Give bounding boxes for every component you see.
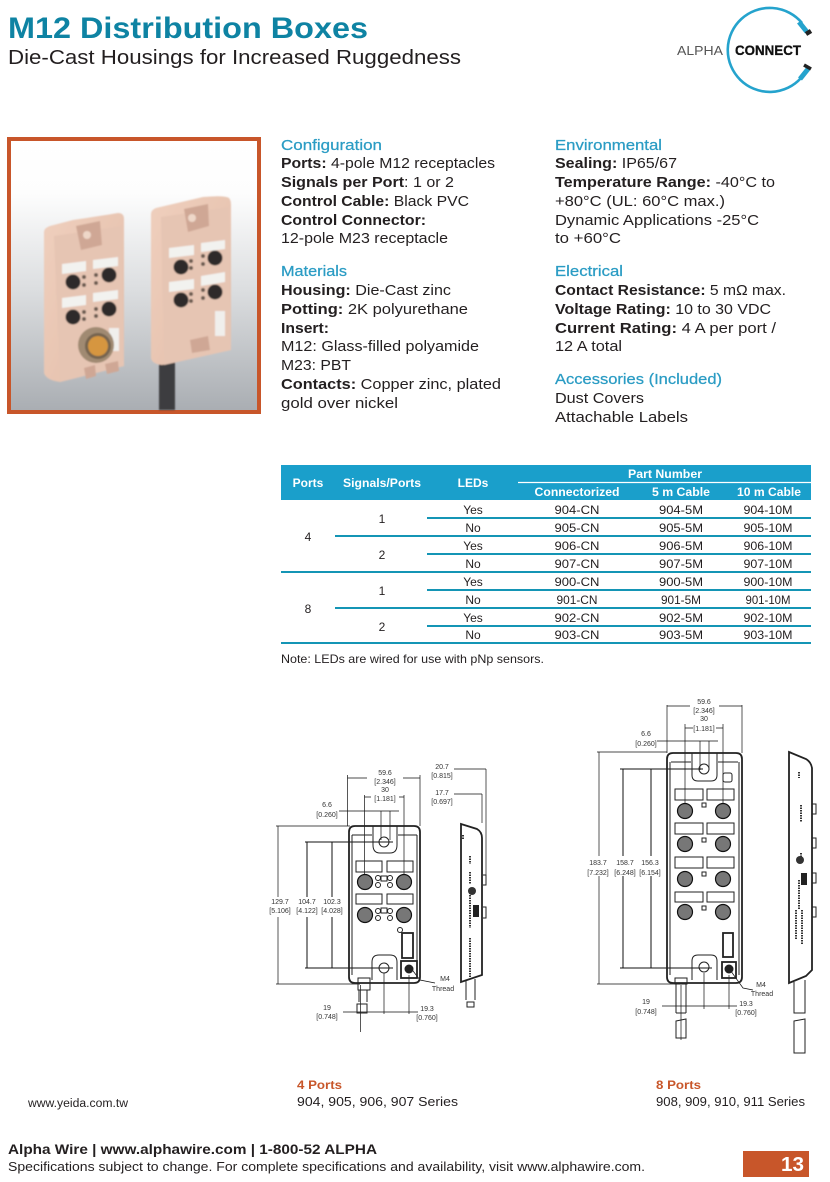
table merged cells: 4 bbox=[305, 530, 312, 544]
dimension labels: 19.3 bbox=[739, 1001, 753, 1008]
panel: environmental specs: Environmental bbox=[555, 137, 662, 154]
panel: materials specs: Insert: bbox=[281, 320, 329, 337]
table rows: Yes bbox=[463, 575, 483, 589]
panel: electrical specs: 12 A total bbox=[555, 338, 622, 355]
panel: configuration specs bbox=[281, 137, 495, 247]
subtitle: Die-Cast Housings for Increased Ruggedness bbox=[8, 47, 461, 69]
dimension labels: [0.760] bbox=[416, 1015, 438, 1022]
table rows: 902-5M bbox=[659, 611, 703, 625]
caption: 4 ports: 4 Ports bbox=[297, 1078, 342, 1092]
panel: environmental specs: to +60°C bbox=[555, 230, 621, 247]
table merged cells: 1 bbox=[379, 512, 386, 526]
dimension labels: 6.6 bbox=[322, 802, 332, 809]
website note: www.yeida.com.tw bbox=[27, 1098, 129, 1110]
dimension labels: [4.028] bbox=[321, 908, 343, 915]
table merged cells: 2 bbox=[379, 620, 386, 634]
front view bbox=[667, 753, 742, 1038]
drawing: 4 ports bbox=[269, 764, 486, 1032]
panel: configuration specs: Configuration bbox=[281, 137, 382, 154]
table rows: 906-10M bbox=[744, 539, 792, 553]
panel: materials specs bbox=[281, 263, 501, 412]
panel: materials specs: Contacts: Copper zinc, plated bbox=[281, 376, 501, 393]
footer bbox=[8, 1141, 645, 1174]
dimension labels: 20.7 bbox=[435, 764, 449, 771]
panel: electrical specs: Contact Resistance: 5 mΩ max. bbox=[555, 282, 786, 299]
cable stub bbox=[159, 360, 175, 410]
panel: environmental specs bbox=[555, 137, 775, 247]
table header: 10 m Cable bbox=[737, 485, 801, 499]
dimension labels: 59.6 bbox=[378, 770, 392, 777]
dimension labels: [6.154] bbox=[639, 870, 661, 877]
panel: configuration specs: 12-pole M23 receptacle bbox=[281, 230, 448, 247]
dimension labels: [1.181] bbox=[693, 726, 715, 733]
caption: 4 ports bbox=[297, 1078, 459, 1109]
table rows: 901-CN bbox=[556, 593, 598, 607]
M23 connector bbox=[78, 327, 114, 363]
table merged cells: 2 bbox=[379, 548, 386, 562]
table rows: Yes bbox=[463, 611, 483, 625]
logo: Alpha Connect: ALPHA bbox=[677, 43, 723, 58]
table header: Connectorized bbox=[534, 485, 620, 499]
dimension labels: 158.7 bbox=[616, 860, 634, 867]
panel: accessories: Accessories (Included) bbox=[555, 371, 722, 388]
panel: accessories: Dust Covers bbox=[555, 390, 644, 407]
dimension labels: [2.346] bbox=[693, 708, 715, 715]
logo: Alpha Connect: CONNECT bbox=[735, 43, 802, 58]
dimension labels: 30 bbox=[700, 716, 708, 723]
table rows: 903-10M bbox=[744, 628, 792, 642]
dimension labels: [0.260] bbox=[635, 741, 657, 748]
dimension labels: Thread bbox=[432, 986, 454, 993]
table rows: 900-10M bbox=[744, 575, 792, 589]
panel: electrical specs: Current Rating: 4 A per port / bbox=[555, 320, 777, 337]
table rows: 903-5M bbox=[659, 628, 703, 642]
dimension labels: [7.232] bbox=[587, 870, 609, 877]
dimension labels bbox=[587, 699, 773, 1017]
table rows: 904-10M bbox=[744, 503, 792, 517]
dimension labels: 19.3 bbox=[420, 1006, 434, 1013]
dimension labels: [0.760] bbox=[735, 1010, 757, 1017]
panel: configuration specs: Signals per Port : 1 or 2 bbox=[281, 174, 454, 191]
dimension labels: [5.106] bbox=[269, 908, 291, 915]
logo: Alpha Connect bbox=[677, 8, 811, 92]
dimension labels: 102.3 bbox=[323, 899, 341, 906]
dimension labels: [0.697] bbox=[431, 799, 453, 806]
dimension labels: M4 bbox=[440, 976, 450, 983]
dimension labels: [2.346] bbox=[374, 779, 396, 786]
caption: 8 ports bbox=[656, 1078, 805, 1109]
caption: 8 ports: 908, 909, 910, 911 Series bbox=[656, 1094, 805, 1109]
page number: 13 bbox=[781, 1154, 804, 1176]
table rows: 901-5M bbox=[661, 593, 701, 607]
table rules bbox=[281, 518, 811, 643]
table rows: 904-5M bbox=[659, 503, 703, 517]
panel: electrical specs: Electrical bbox=[555, 263, 623, 280]
table header bbox=[281, 465, 811, 500]
table rows: 905-5M bbox=[659, 521, 703, 535]
panel: materials specs: M23: PBT bbox=[281, 357, 351, 374]
dimension labels: 17.7 bbox=[435, 790, 449, 797]
dimension labels: M4 bbox=[756, 982, 766, 989]
panel: configuration specs: Ports: 4-pole M12 receptacles bbox=[281, 155, 495, 172]
table header: Signals/Ports bbox=[343, 476, 421, 490]
dimension labels: [0.748] bbox=[316, 1014, 338, 1021]
panel: materials specs: M12: Glass-filled polyamide bbox=[281, 338, 479, 355]
panel: materials specs: Housing: Die-Cast zinc bbox=[281, 282, 452, 299]
table header: 5 m Cable bbox=[652, 485, 710, 499]
dimension labels: [6.248] bbox=[614, 870, 636, 877]
photo: distribution boxes bbox=[9, 139, 259, 412]
table rows: 900-5M bbox=[659, 575, 703, 589]
table rows: 902-CN bbox=[554, 611, 600, 625]
dimension labels: Thread bbox=[751, 991, 773, 998]
panel: configuration specs: Control Connector: bbox=[281, 212, 426, 229]
dimension labels: [0.748] bbox=[635, 1009, 657, 1016]
table rows: Yes bbox=[463, 503, 483, 517]
table header: Part Number bbox=[628, 467, 702, 481]
panel: accessories bbox=[555, 371, 722, 426]
dimension labels: [4.122] bbox=[296, 908, 318, 915]
dimension lines bbox=[276, 769, 486, 1032]
dimension labels: 6.6 bbox=[641, 731, 651, 738]
page number bbox=[743, 1151, 809, 1177]
dimension labels: 30 bbox=[381, 787, 389, 794]
panel: materials specs: gold over nickel bbox=[281, 395, 398, 412]
table note: Note: LEDs are wired for use with pNp sensors. bbox=[281, 652, 544, 666]
table merged cells bbox=[305, 512, 386, 634]
panel: configuration specs: Control Cable: Black PVC bbox=[281, 193, 469, 210]
table rows: No bbox=[465, 557, 481, 571]
table header: Ports bbox=[293, 476, 324, 490]
table rows: 902-10M bbox=[744, 611, 792, 625]
table rows: 907-CN bbox=[554, 557, 600, 571]
table rows: 906-CN bbox=[554, 539, 600, 553]
table rows: 904-CN bbox=[554, 503, 600, 517]
dimension labels: 156.3 bbox=[641, 860, 659, 867]
caption: 8 ports: 8 Ports bbox=[656, 1078, 701, 1092]
table rows: 901-10M bbox=[746, 593, 790, 607]
dimension labels: [1.181] bbox=[374, 796, 396, 803]
table rows: Yes bbox=[463, 539, 483, 553]
side view bbox=[789, 752, 816, 1053]
footer: Alpha Wire | www.alphawire.com | 1-800-52 ALPHA bbox=[8, 1141, 377, 1157]
front view bbox=[349, 826, 420, 1013]
dimension labels: 19 bbox=[642, 999, 650, 1006]
left box body bbox=[44, 213, 124, 382]
panel: materials specs: Materials bbox=[281, 263, 347, 280]
dimension labels: 59.6 bbox=[697, 699, 711, 706]
panel: electrical specs: Voltage Rating: 10 to 30 VDC bbox=[555, 301, 771, 318]
table rows: 905-CN bbox=[554, 521, 600, 535]
side view bbox=[461, 824, 486, 1007]
dimension labels: 129.7 bbox=[271, 899, 289, 906]
footer: Specifications subject to change. For complete specifications and availability, visit www.alphawire.com. bbox=[8, 1159, 645, 1174]
dimension labels: [0.815] bbox=[431, 773, 453, 780]
title: M12 Distribution Boxes bbox=[8, 12, 368, 45]
caption: 4 ports: 904, 905, 906, 907 Series bbox=[297, 1094, 459, 1109]
right box body bbox=[151, 196, 231, 365]
panel: materials specs: Potting: 2K polyurethane bbox=[281, 301, 468, 318]
table merged cells: 8 bbox=[305, 602, 312, 616]
table rows: 906-5M bbox=[659, 539, 703, 553]
table rows: 907-10M bbox=[744, 557, 792, 571]
panel: environmental specs: Temperature Range: -40°C to bbox=[555, 174, 775, 191]
table rows: 903-CN bbox=[554, 628, 600, 642]
dimension labels: [0.260] bbox=[316, 812, 338, 819]
table rows bbox=[463, 503, 792, 642]
dimension labels: 183.7 bbox=[589, 860, 607, 867]
table rows: 900-CN bbox=[554, 575, 600, 589]
dimension labels bbox=[269, 764, 454, 1022]
dimension labels: 19 bbox=[323, 1005, 331, 1012]
table rows: No bbox=[465, 593, 481, 607]
panel: environmental specs: +80°C (UL: 60°C max.) bbox=[555, 193, 725, 210]
table header: LEDs bbox=[458, 476, 489, 490]
panel: environmental specs: Sealing: IP65/67 bbox=[555, 155, 677, 172]
table rows: No bbox=[465, 521, 481, 535]
table rows: No bbox=[465, 628, 481, 642]
dimension lines bbox=[597, 705, 753, 1040]
dimension labels: 104.7 bbox=[298, 899, 316, 906]
panel: environmental specs: Dynamic Applications -25°C bbox=[555, 212, 759, 229]
drawing: 8 ports bbox=[587, 699, 816, 1053]
panel: accessories: Attachable Labels bbox=[555, 409, 688, 426]
table merged cells: 1 bbox=[379, 584, 386, 598]
table rows: 907-5M bbox=[659, 557, 703, 571]
part number table bbox=[281, 465, 811, 643]
panel: electrical specs bbox=[555, 263, 786, 355]
table rows: 905-10M bbox=[744, 521, 792, 535]
